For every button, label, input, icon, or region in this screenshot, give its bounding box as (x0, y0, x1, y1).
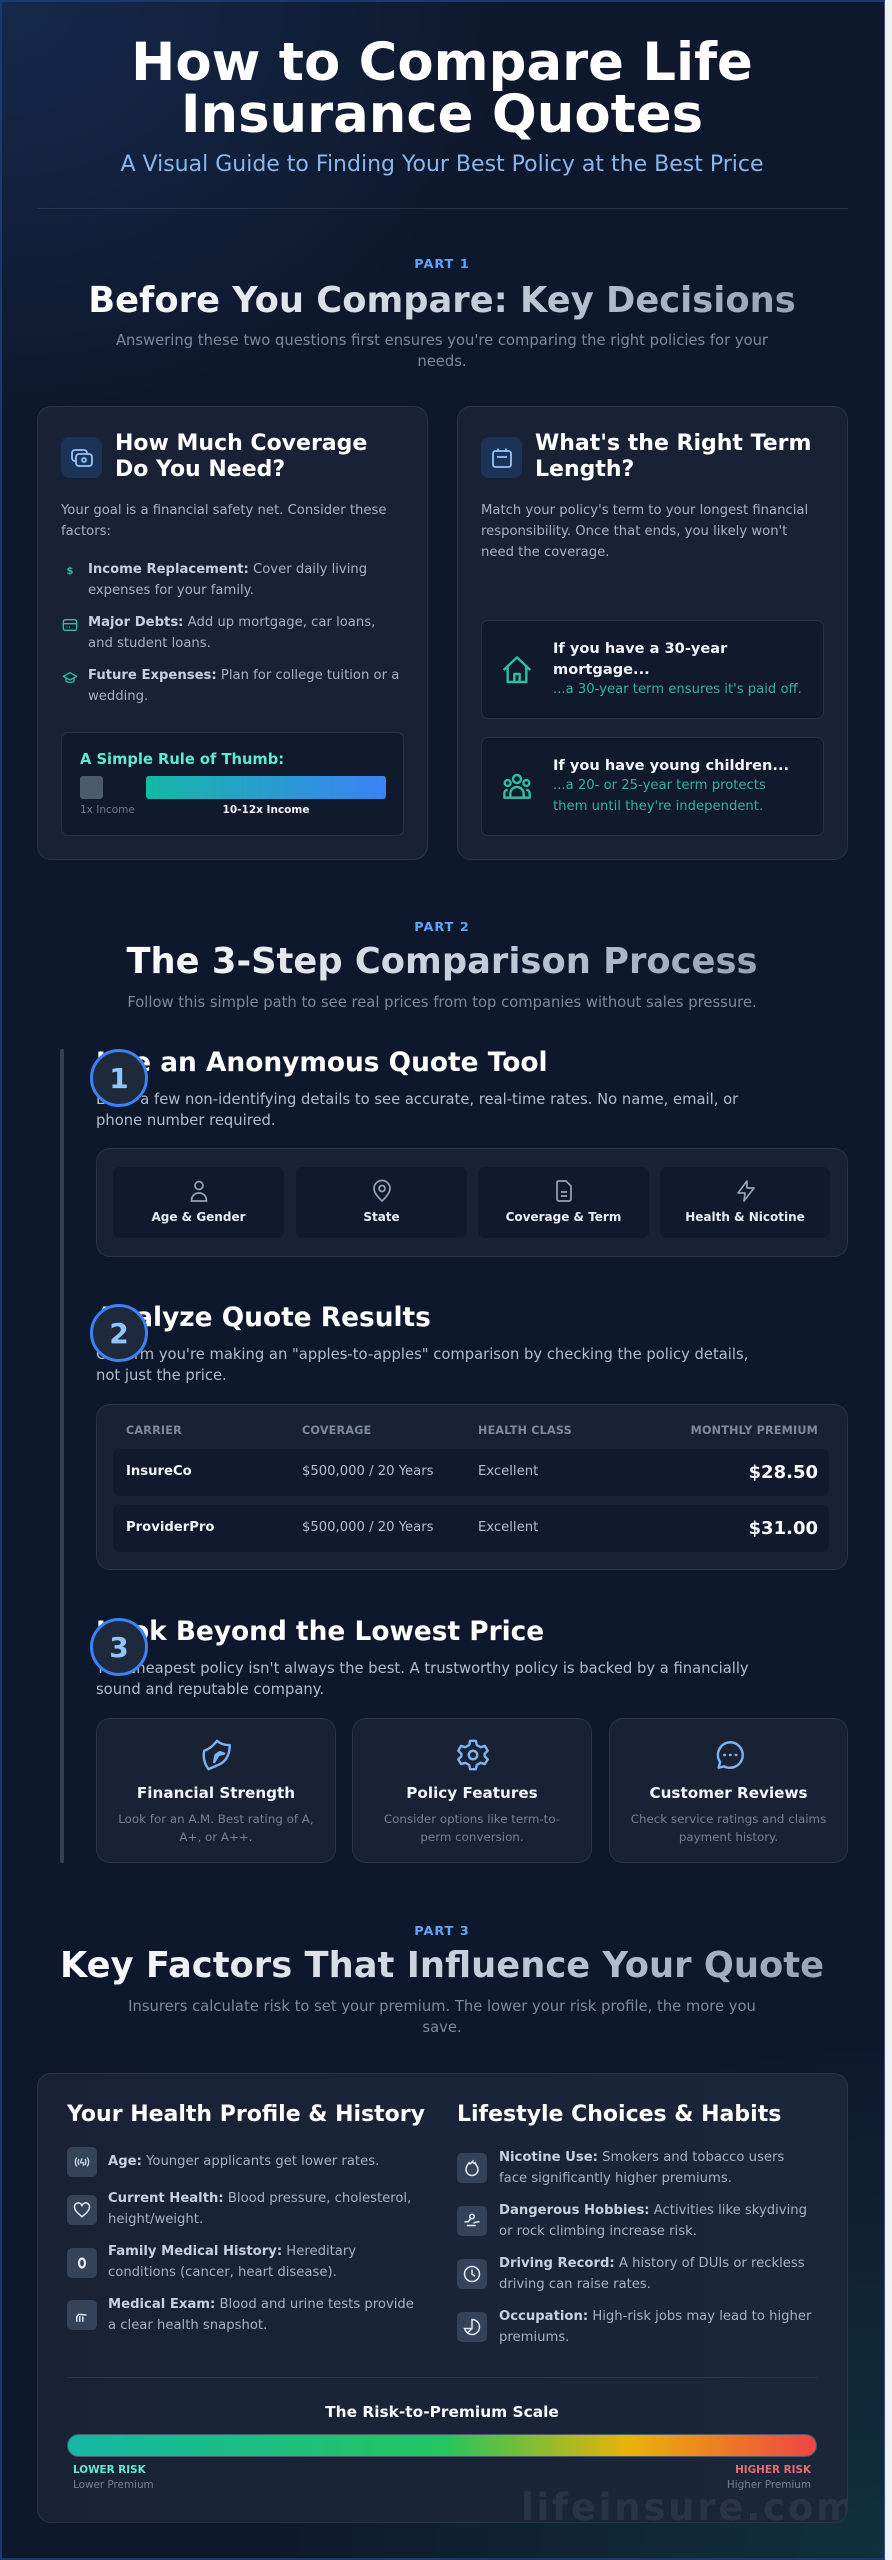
icon: occupation (457, 2312, 487, 2342)
1x label: 1x Income (80, 804, 135, 816)
risk scale heading: The Risk-to-Premium Scale (325, 2403, 559, 2421)
term heading: Length? (535, 457, 634, 482)
part 3 heading: Key Factors That Influence Your Quote (60, 1945, 824, 1986)
card: customer reviews: payment history. (679, 1830, 778, 1844)
tile: coverage and term: Coverage & Term (506, 1210, 621, 1224)
rule of thumb box (61, 732, 404, 836)
health column (66, 2102, 425, 2333)
icon: family (503, 774, 531, 799)
card: policy features: Consider options like term-to- (384, 1812, 560, 1826)
mortgage text: mortgage... (553, 660, 650, 678)
step 2 number: 2 (109, 1316, 129, 1350)
step 1 number (90, 1049, 148, 1107)
table row: ProviderPro: ProviderPro (126, 1520, 214, 1535)
income replacement (88, 562, 367, 598)
part 2 label: PART 2 (414, 920, 470, 935)
tile: age and gender: Age & Gender (151, 1210, 246, 1224)
coverage heading: Do You Need? (115, 457, 285, 482)
step 3 description: sound and reputable company. (96, 1680, 324, 1698)
card: customer reviews: Check service ratings and claims (631, 1812, 826, 1826)
card: policy features (352, 1718, 592, 1863)
icon: banknotes (61, 437, 102, 478)
table row: InsureCo (113, 1449, 829, 1496)
step 3 number: 3 (109, 1630, 129, 1664)
higher risk labels (727, 2464, 812, 2491)
table row: InsureCo: $500,000 / 20 Years (302, 1464, 434, 1479)
step 3 description (96, 1660, 749, 1698)
table row: ProviderPro: $31.00 (749, 1518, 818, 1539)
children text: If you have young children... (553, 757, 789, 774)
exam text: Medical Exam: Blood and urine tests provide (108, 2297, 414, 2312)
mortgage text (553, 640, 802, 697)
table row: ProviderPro: Excellent (478, 1520, 538, 1535)
coverage intro: Your goal is a financial safety net. Consider these (61, 503, 386, 518)
nicotine text: face significantly higher premiums. (499, 2171, 732, 2186)
future expenses (88, 668, 399, 704)
card: customer reviews (609, 1718, 848, 1863)
card: customer reviews: Customer Reviews (649, 1784, 808, 1802)
term intro (481, 503, 808, 560)
part 3 intro: Insurers calculate risk to set your premium. The lower your risk profile, the more you (128, 1998, 756, 2015)
icon: dollar: $ (67, 566, 73, 577)
children text (553, 757, 789, 814)
age text: Age: Younger applicants get lower rates. (108, 2154, 379, 2169)
icon: house (502, 656, 532, 684)
subtitle: A Visual Guide to Finding Your Best Policy at the Best Price (120, 152, 764, 177)
10-12x bar (146, 776, 386, 799)
future expenses: Future Expenses: Plan for college tuition or a (88, 668, 399, 683)
panel: term length (457, 406, 848, 860)
occupation text: premiums. (499, 2330, 569, 2345)
driving text (499, 2256, 805, 2292)
step 1 number: 1 (109, 1062, 129, 1094)
hobbies text: or rock climbing increase risk. (499, 2224, 697, 2239)
term heading (535, 431, 811, 482)
hobbies text: Dangerous Hobbies: Activities like skydiving (499, 2203, 807, 2218)
step 2 number (90, 1304, 148, 1362)
higher risk labels: Higher Premium (727, 2479, 811, 2491)
lifestyle column (457, 2102, 812, 2345)
tile: state (296, 1167, 467, 1238)
icon: calendar (481, 437, 522, 478)
current health text: height/weight. (108, 2212, 203, 2227)
coverage heading (115, 431, 367, 482)
part 1 intro: needs. (417, 353, 467, 370)
table row: InsureCo: $28.50 (749, 1462, 818, 1483)
table header: CARRIER (126, 1424, 182, 1437)
step 2 heading: Analyze Quote Results (96, 1302, 431, 1333)
occupation text (499, 2309, 812, 2345)
table row: InsureCo: InsureCo (126, 1464, 192, 1479)
part 1 label: PART 1 (414, 257, 470, 272)
part 3 intro (128, 1998, 756, 2036)
exam text: a clear health snapshot. (108, 2318, 267, 2333)
icon: flame (457, 2153, 487, 2183)
tile: coverage and term (478, 1167, 649, 1238)
title (131, 32, 753, 145)
part 2 intro: Follow this simple path to see real prices from top companies without sales pressure. (127, 994, 757, 1011)
part 1 intro (116, 332, 768, 370)
panel: quote inputs (96, 1148, 848, 1257)
icon: credit card (62, 619, 78, 631)
table header: HEALTH CLASS (478, 1424, 572, 1437)
icon: hobbies (457, 2206, 487, 2236)
title: How to Compare Life (131, 32, 753, 93)
table row: InsureCo: Excellent (478, 1464, 538, 1479)
title: Insurance Quotes (181, 84, 703, 145)
mortgage example (481, 620, 824, 719)
hobbies text (499, 2203, 807, 2239)
income replacement: Income Replacement: Cover daily living (88, 562, 367, 577)
icon: clock (457, 2259, 487, 2289)
step 2 description (96, 1346, 748, 1384)
panel: coverage (37, 406, 428, 860)
term intro: responsibility. Once that ends, you likely won't (481, 524, 787, 539)
step 3 number (90, 1618, 148, 1676)
rule heading: A Simple Rule of Thumb: (80, 751, 284, 768)
table header: MONTHLY PREMIUM (691, 1424, 818, 1437)
10-12x label: 10-12x Income (223, 804, 309, 816)
lifestyle heading: Lifestyle Choices & Habits (457, 2102, 781, 2127)
step 3 heading: Look Beyond the Lowest Price (96, 1616, 544, 1647)
health heading: Your Health Profile & History (67, 2102, 425, 2127)
table row: ProviderPro (113, 1505, 829, 1552)
future expenses: wedding. (88, 689, 148, 704)
term intro: need the coverage. (481, 545, 609, 560)
children text: them until they're independent. (553, 798, 763, 814)
risk scale bar (67, 2434, 817, 2457)
driving text: driving can raise rates. (499, 2277, 651, 2292)
coverage intro: factors: (61, 524, 111, 539)
step 1 description: phone number required. (96, 1112, 276, 1128)
coverage intro (61, 503, 386, 539)
table row: ProviderPro: $500,000 / 20 Years (302, 1520, 434, 1535)
occupation text: Occupation: High-risk jobs may lead to higher (499, 2309, 811, 2324)
card: policy features: perm conversion. (420, 1830, 524, 1844)
step 1 description (96, 1091, 738, 1128)
card: policy features: Policy Features (406, 1784, 538, 1802)
family history text (108, 2244, 356, 2280)
part 2 heading: The 3-Step Comparison Process (126, 941, 758, 982)
icon: graduation cap (62, 672, 78, 683)
nicotine text (499, 2150, 784, 2186)
driving text: Driving Record: A history of DUIs or reckless (499, 2256, 805, 2271)
part 3 intro: save. (422, 2019, 462, 2036)
card: financial strength (96, 1718, 336, 1863)
card: financial strength: Financial Strength (137, 1784, 295, 1802)
icon: exam (67, 2300, 97, 2330)
term intro: Match your policy's term to your longest financial (481, 503, 808, 518)
table header: COVERAGE (302, 1424, 371, 1437)
step 1 heading: Use an Anonymous Quote Tool (96, 1047, 548, 1078)
income replacement: expenses for your family. (88, 583, 254, 598)
part 3 label: PART 3 (414, 1924, 470, 1939)
tile: state: State (363, 1210, 400, 1224)
term heading: What's the Right Term (535, 431, 811, 456)
part 1 heading: Before You Compare: Key Decisions (88, 280, 796, 321)
current health text: Current Health: Blood pressure, cholesterol, (108, 2191, 411, 2206)
icon: family history (67, 2248, 97, 2278)
mortgage text: If you have a 30-year (553, 640, 727, 657)
family history text: conditions (cancer, heart disease). (108, 2265, 337, 2280)
card: financial strength: A+, or A++. (179, 1830, 253, 1844)
higher risk labels: HIGHER RISK (735, 2464, 811, 2476)
major debts: and student loans. (88, 636, 211, 651)
step 3 description: The cheapest policy isn't always the best. A trustworthy policy is backed by a financially (96, 1660, 749, 1677)
major debts (88, 615, 375, 651)
tile: age and gender (113, 1167, 284, 1238)
icon: heart (67, 2195, 97, 2225)
tile: health and nicotine (660, 1167, 830, 1238)
children text: ...a 20- or 25-year term protects (553, 778, 766, 793)
table header (126, 1424, 818, 1437)
nicotine text: Nicotine Use: Smokers and tobacco users (499, 2150, 784, 2165)
lower risk labels: LOWER RISK (73, 2464, 146, 2476)
exam text (108, 2297, 414, 2333)
card: financial strength: Look for an A.M. Best rating of A, (118, 1812, 314, 1826)
current health text (108, 2191, 411, 2227)
lower risk labels: Lower Premium (73, 2479, 154, 2491)
coverage heading: How Much Coverage (115, 431, 367, 456)
panel: quote table (96, 1404, 848, 1570)
step 2 description: not just the price. (96, 1366, 227, 1384)
tile: health and nicotine: Health & Nicotine (685, 1210, 805, 1224)
step 1 description: Enter a few non-identifying details to see accurate, real-time rates. No name, email, or (96, 1091, 738, 1108)
lower risk labels (73, 2464, 154, 2491)
children example (481, 737, 824, 836)
step 2 description: Confirm you're making an "apples-to-apples" comparison by checking the policy details, (96, 1346, 748, 1363)
icon: age (67, 2147, 97, 2177)
family history text: Family Medical History: Hereditary (108, 2244, 356, 2259)
major debts: Major Debts: Add up mortgage, car loans, (88, 615, 375, 630)
panel: key factors (37, 2073, 848, 2523)
mortgage text: ...a 30-year term ensures it's paid off. (553, 682, 802, 697)
part 1 intro: Answering these two questions first ensures you're comparing the right policies for your (116, 332, 768, 349)
1x bar (80, 776, 103, 799)
timeline line (60, 1049, 64, 1863)
